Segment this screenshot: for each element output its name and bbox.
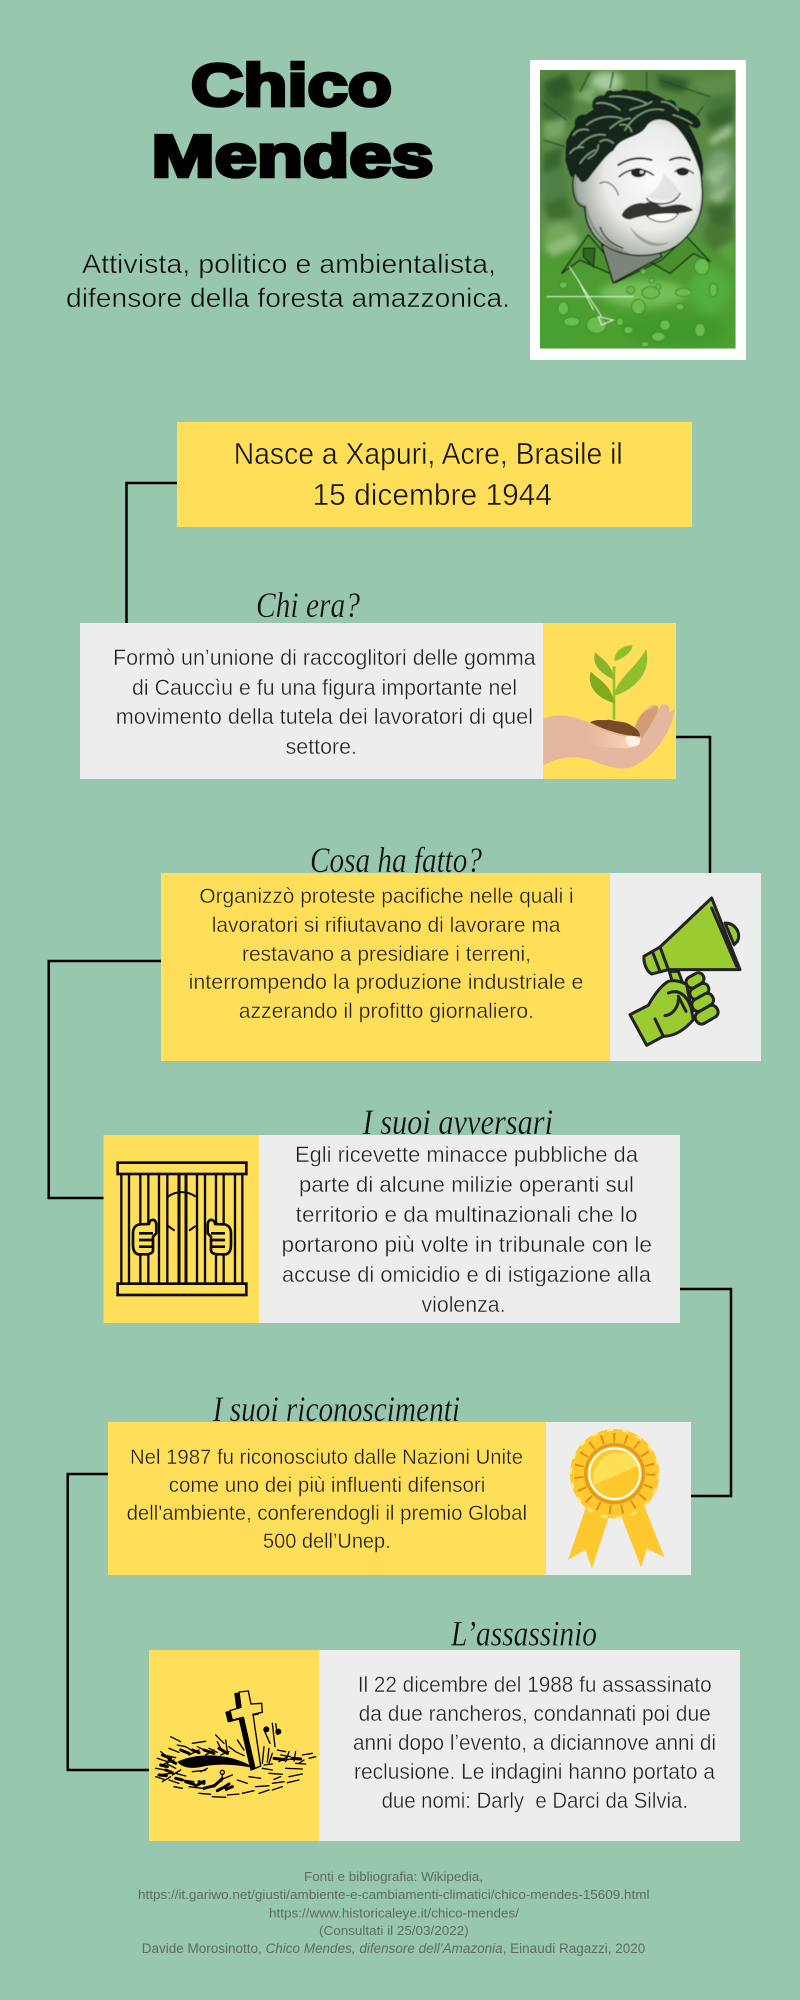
panel: cosa ha fatto: Organizzò proteste pacifiche nelle quali i [199, 884, 574, 908]
mustache and mouth [622, 202, 693, 219]
panel: cosa ha fatto: lavoratori si rifiutavano di lavorare ma [212, 913, 561, 937]
panel: chi era: settore. [286, 734, 357, 759]
panel: cosa ha fatto [161, 873, 761, 1061]
panel: assassinio: anni dopo l’evento, a diciannove anni di [353, 1730, 716, 1755]
panel: riconoscimenti: 500 dell’Unep. [263, 1529, 391, 1553]
panel: avversari [104, 1135, 680, 1323]
footer: sources: https://it.gariwo.net/giusti/ambiente-e-cambiamenti-climatici/chico-mendes-15609.html [138, 1887, 650, 1902]
panel: riconoscimenti: Nel 1987 fu riconosciuto dalle Nazioni Unite [130, 1445, 523, 1469]
footer: sources [138, 1869, 650, 1956]
panel: cosa ha fatto: interrompendo la produzione industriale e [189, 970, 584, 994]
face [573, 116, 702, 255]
panel: birth: 15 dicembre 1944 [312, 477, 552, 512]
heading: L'assassinio: L’assassinio [450, 1614, 597, 1654]
subtitle: difensore della foresta amazzonica. [66, 283, 510, 313]
title [152, 52, 434, 190]
panel: birth: Nasce a Xapuri, Acre, Brasile il [234, 436, 623, 471]
icon: award rosette [568, 1429, 665, 1569]
panel: chi era: Formò un’unione di raccoglitori delle gomma [113, 645, 536, 670]
panel: assassinio [149, 1650, 740, 1841]
footer: sources: (Consultati il 25/03/2022) [319, 1923, 469, 1938]
icon: plant in hand [543, 645, 675, 769]
icon: prison bars [118, 1163, 246, 1295]
panel: chi era [80, 623, 676, 779]
water drops [558, 259, 717, 347]
panel: assassinio: due nomi: Darly e Darci da Silvia. [382, 1788, 688, 1813]
subtitle [66, 249, 510, 313]
subtitle: Attivista, politico e ambientalista, [82, 249, 496, 279]
panel: chi era: movimento della tutela dei lavoratori di quel [116, 704, 533, 729]
panel: birth [177, 422, 692, 527]
panel: assassinio: reclusione. Le indagini hanno portato a [354, 1759, 716, 1784]
panel: chi era: di Cauccìu e fu una figura importante nel [132, 675, 517, 700]
panel: assassinio: da due rancheros, condannati poi due [359, 1701, 711, 1726]
heading: I suoi avversari: I suoi avversari [362, 1102, 553, 1142]
panel: assassinio: Il 22 dicembre del 1988 fu assassinato [358, 1672, 712, 1697]
panel: avversari: violenza. [422, 1292, 506, 1317]
title: Chico [191, 52, 392, 118]
signature [547, 267, 633, 325]
panel: riconoscimenti: dell'ambiente, conferendogli il premio Global [127, 1501, 527, 1525]
icon: megaphone in hand [630, 898, 740, 1045]
panel: avversari: accuse di omicidio e di istigazione alla [282, 1262, 652, 1287]
eyebrows and eyes [600, 158, 693, 204]
panel: riconoscimenti: come uno dei più influenti difensori [169, 1473, 485, 1497]
footer: sources: Fonti e bibliografia: Wikipedia, [304, 1869, 483, 1884]
panel: cosa ha fatto: azzerando il profitto giornaliero. [239, 999, 534, 1023]
panel: avversari: parte di alcune milizie operanti sul [299, 1172, 634, 1197]
heading: Cosa ha fatto?: Cosa ha fatto? [310, 840, 482, 880]
heading: I suoi riconoscimenti: I suoi riconoscimenti [212, 1389, 460, 1429]
title: Mendes [152, 124, 434, 190]
panel: avversari: portarono più volte in tribunale con le [282, 1232, 652, 1257]
heading: Chi era?: Chi era? [256, 585, 360, 625]
panel: riconoscimenti [108, 1422, 691, 1575]
footer: sources: Davide Morosinotto, Chico Mendes, difensore dell’Amazonia, Einaudi Ragazzi, 2020 [142, 1941, 645, 1956]
panel: avversari: territorio e da multinazionali che lo [296, 1202, 638, 1227]
shirt collar and neck [562, 235, 710, 283]
panel: cosa ha fatto: restavano a presidiare i terreni, [242, 942, 531, 966]
panel: avversari: Egli ricevette minacce pubbliche da [295, 1142, 639, 1167]
connector lines [49, 483, 731, 1770]
icon: grave with cross [156, 1691, 316, 1797]
portrait of Chico Mendes [530, 60, 746, 360]
hair [565, 89, 702, 182]
footer: sources: https://www.historicaleye.it/chico-mendes/ [269, 1906, 519, 1920]
